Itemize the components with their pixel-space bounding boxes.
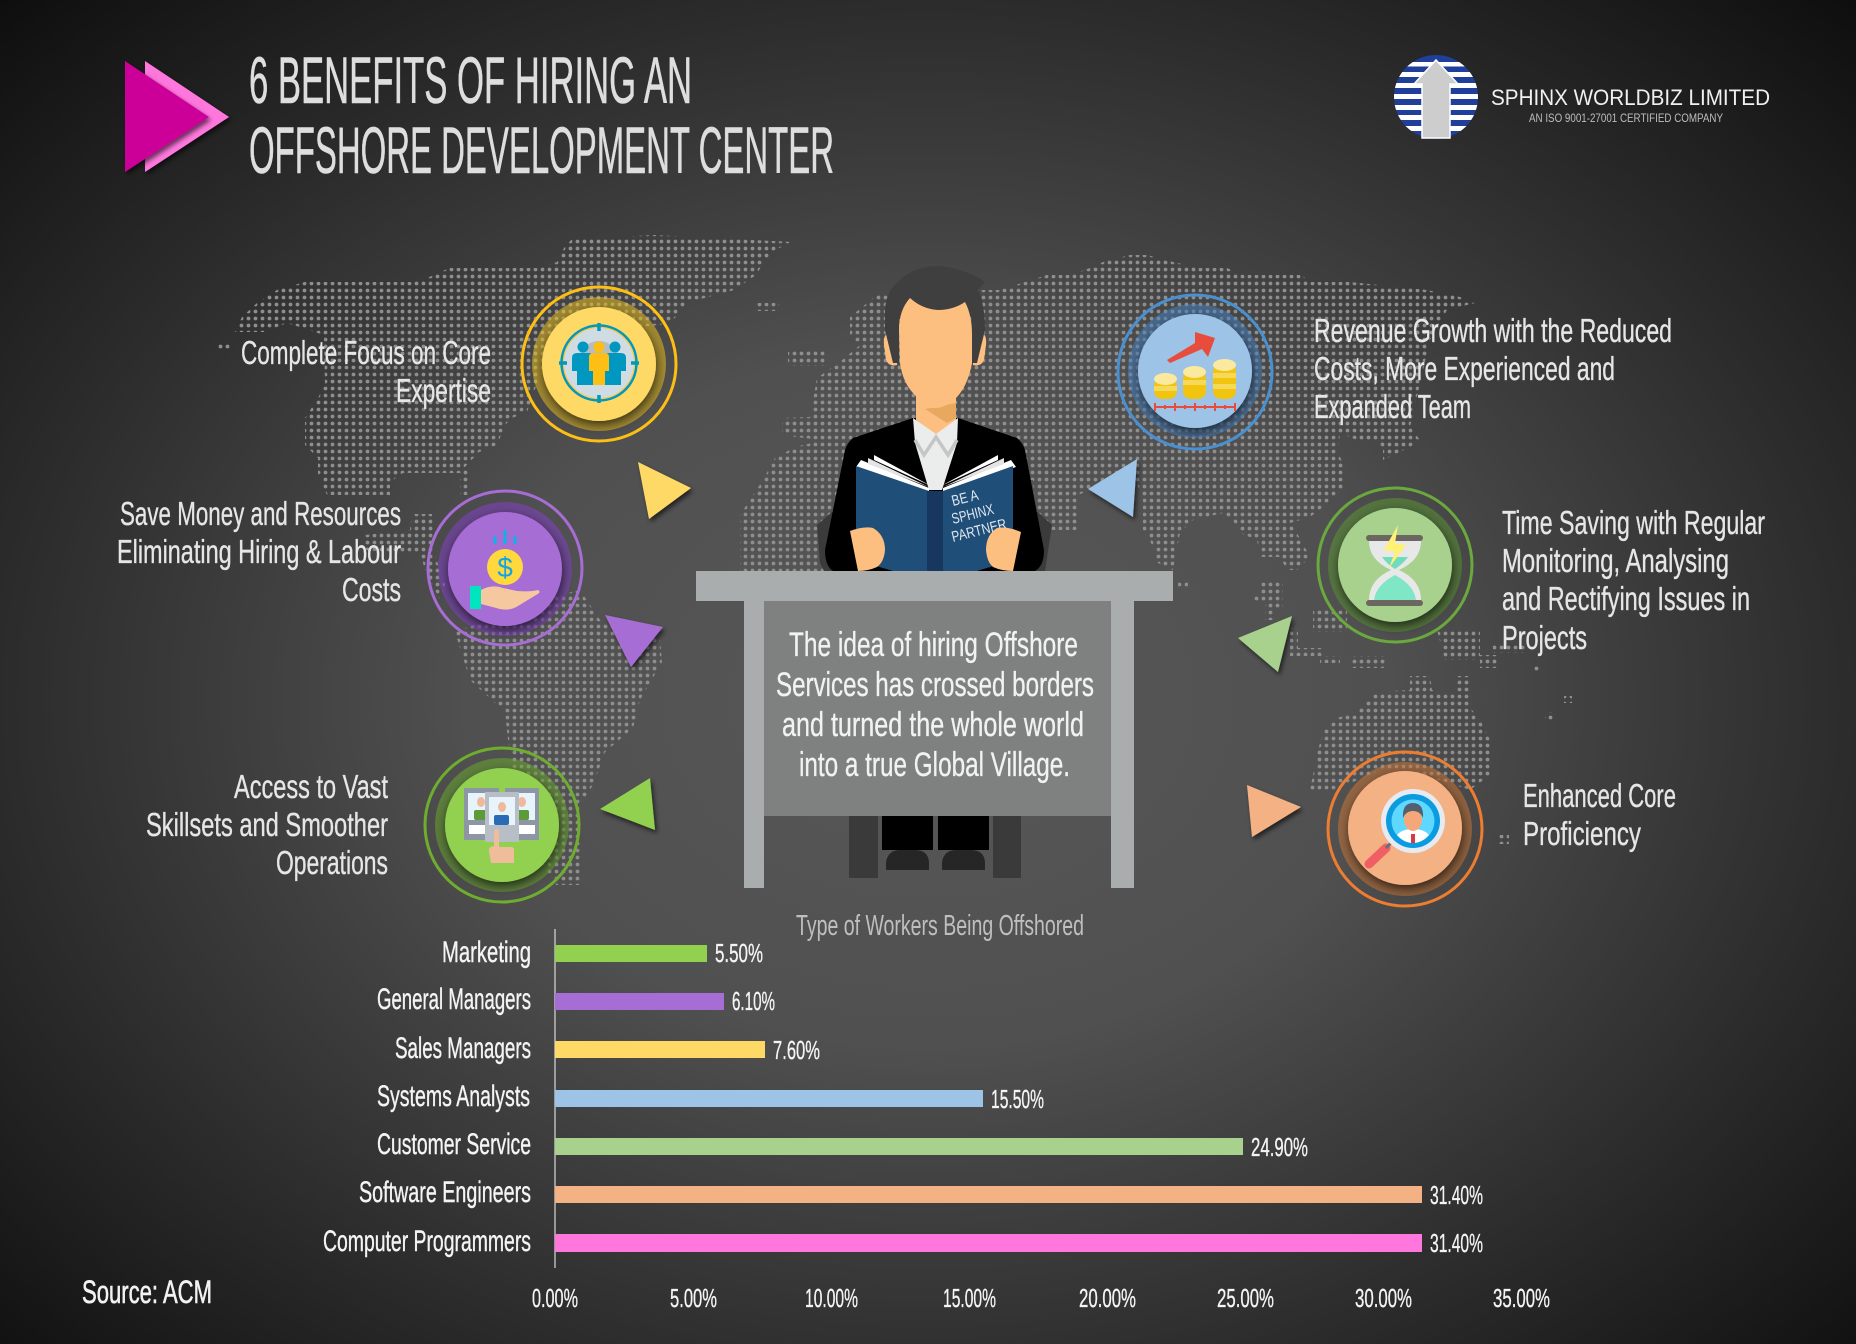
source note: Source: ACM — [82, 1274, 212, 1310]
label: enhanced proficiency: Proficiency — [1523, 815, 1641, 852]
label: time saving: Monitoring, Analysing — [1502, 542, 1729, 579]
arrow: orange — [1247, 785, 1301, 837]
desk panel text: into a true Global Village. — [799, 746, 1070, 784]
category labels: Customer Service — [377, 1128, 531, 1161]
desk panel — [764, 601, 1111, 816]
icon: revenue growth badge — [1118, 295, 1272, 449]
desk panel text: Services has crossed borders — [776, 666, 1094, 704]
category labels: Software Engineers — [359, 1176, 531, 1209]
desk and legs under it — [696, 571, 1173, 888]
label: enhanced proficiency: Enhanced Core — [1523, 777, 1676, 814]
value labels: 6.10% — [732, 986, 775, 1016]
label: save money: Costs — [342, 571, 401, 608]
arrow: green — [600, 778, 655, 830]
label: save money: Eliminating Hiring & Labour — [117, 533, 401, 570]
value labels: 31.40% — [1430, 1180, 1483, 1210]
arrow: light green — [1238, 616, 1292, 672]
label: access to skillsets: Access to Vast — [234, 768, 388, 805]
chart title: Type of Workers Being Offshored — [796, 910, 1084, 942]
label: access to skillsets — [146, 768, 388, 881]
label: access to skillsets: Skillsets and Smoother — [146, 806, 388, 843]
book — [856, 460, 929, 492]
label: revenue growth: Expanded Team — [1314, 388, 1471, 425]
label: revenue growth — [1314, 312, 1672, 425]
neck — [916, 385, 956, 436]
face — [899, 298, 972, 408]
arrow: yellow — [638, 462, 691, 519]
label: time saving: Projects — [1502, 619, 1587, 656]
value labels: 24.90% — [1251, 1132, 1308, 1162]
businessman reading a book: SPHINX — [950, 501, 996, 528]
logo name: SPHINX WORLDBIZ LIMITED — [1491, 85, 1770, 110]
world map dots — [216, 235, 1572, 885]
label: time saving: and Rectifying Issues in — [1502, 580, 1750, 617]
desk legs — [744, 601, 764, 888]
x axis labels: 20.00% — [1079, 1283, 1136, 1313]
businessman reading a book: PARTNER — [950, 516, 1008, 546]
x axis labels: 0.00% — [532, 1283, 578, 1313]
arrow: purple — [605, 615, 663, 667]
text: OFFSHORE DEVELOPMENT CENTER — [249, 113, 834, 187]
x axis labels: 15.00% — [943, 1283, 996, 1313]
x axis labels — [532, 1283, 1550, 1313]
value labels: 5.50% — [715, 938, 763, 968]
coin stacks — [1154, 359, 1236, 399]
value labels: 15.50% — [991, 1084, 1044, 1114]
value labels: 7.60% — [773, 1035, 820, 1065]
category labels: Computer Programmers — [323, 1225, 531, 1258]
label: complete focus — [241, 334, 491, 409]
category labels: Sales Managers — [395, 1032, 531, 1065]
value labels — [715, 938, 1483, 1258]
trousers — [882, 816, 933, 850]
label: save money: Save Money and Resources — [120, 495, 401, 532]
label: access to skillsets: Operations — [276, 844, 388, 881]
label: complete focus: Expertise — [396, 372, 491, 409]
ears — [884, 333, 897, 365]
hair — [885, 266, 985, 363]
title — [249, 43, 834, 187]
arrow: blue — [1088, 459, 1137, 517]
shoes — [886, 850, 929, 870]
shirt — [913, 418, 958, 490]
hands — [850, 527, 885, 571]
icon: money saving badge — [428, 491, 582, 645]
bar chart: type of workers being offshored — [323, 910, 1550, 1313]
label: revenue growth: Revenue Growth with the Reduced — [1314, 312, 1672, 349]
category labels: Systems Analysts — [377, 1080, 530, 1113]
jacket — [825, 418, 1044, 571]
desk panel text: and turned the whole world — [782, 706, 1084, 744]
category labels: Marketing — [442, 936, 531, 969]
category labels: General Managers — [377, 983, 531, 1016]
title: 6 BENEFITS OF HIRING AN — [249, 43, 692, 117]
category labels — [323, 936, 531, 1258]
x axis labels: 25.00% — [1217, 1283, 1274, 1313]
businessman reading a book: BE A — [950, 487, 980, 510]
axis line — [554, 929, 556, 1268]
label: complete focus: Complete Focus on Core — [241, 334, 491, 371]
icon: proficiency badge — [1328, 752, 1482, 906]
chair legs — [849, 816, 878, 878]
x axis labels: 10.00% — [805, 1283, 858, 1313]
icon: hourglass badge — [1318, 488, 1472, 642]
company logo — [1390, 55, 1770, 139]
x axis labels: 30.00% — [1355, 1283, 1412, 1313]
logo emblem — [1390, 55, 1482, 139]
label: save money — [117, 495, 401, 608]
desk top — [696, 571, 1173, 601]
label: time saving — [1502, 504, 1765, 656]
label: enhanced proficiency — [1523, 777, 1676, 852]
title arrow icon — [125, 61, 229, 172]
label: revenue growth: Costs, More Experienced and — [1314, 350, 1615, 387]
icon: team focus badge — [522, 287, 676, 441]
logo tagline: AN ISO 9001-27001 CERTIFIED COMPANY — [1529, 111, 1723, 125]
businessman reading a book — [817, 266, 1052, 571]
desk panel text — [776, 626, 1094, 784]
icon: skillsets badge — [425, 748, 579, 902]
desk panel text: The idea of hiring Offshore — [789, 626, 1078, 664]
x axis labels: 35.00% — [1493, 1283, 1550, 1313]
chair back — [817, 512, 1052, 571]
x axis labels: 5.00% — [670, 1283, 717, 1313]
bars — [555, 945, 1422, 1252]
icon: money saving badge: $ — [497, 552, 513, 583]
value labels: 31.40% — [1430, 1228, 1483, 1258]
